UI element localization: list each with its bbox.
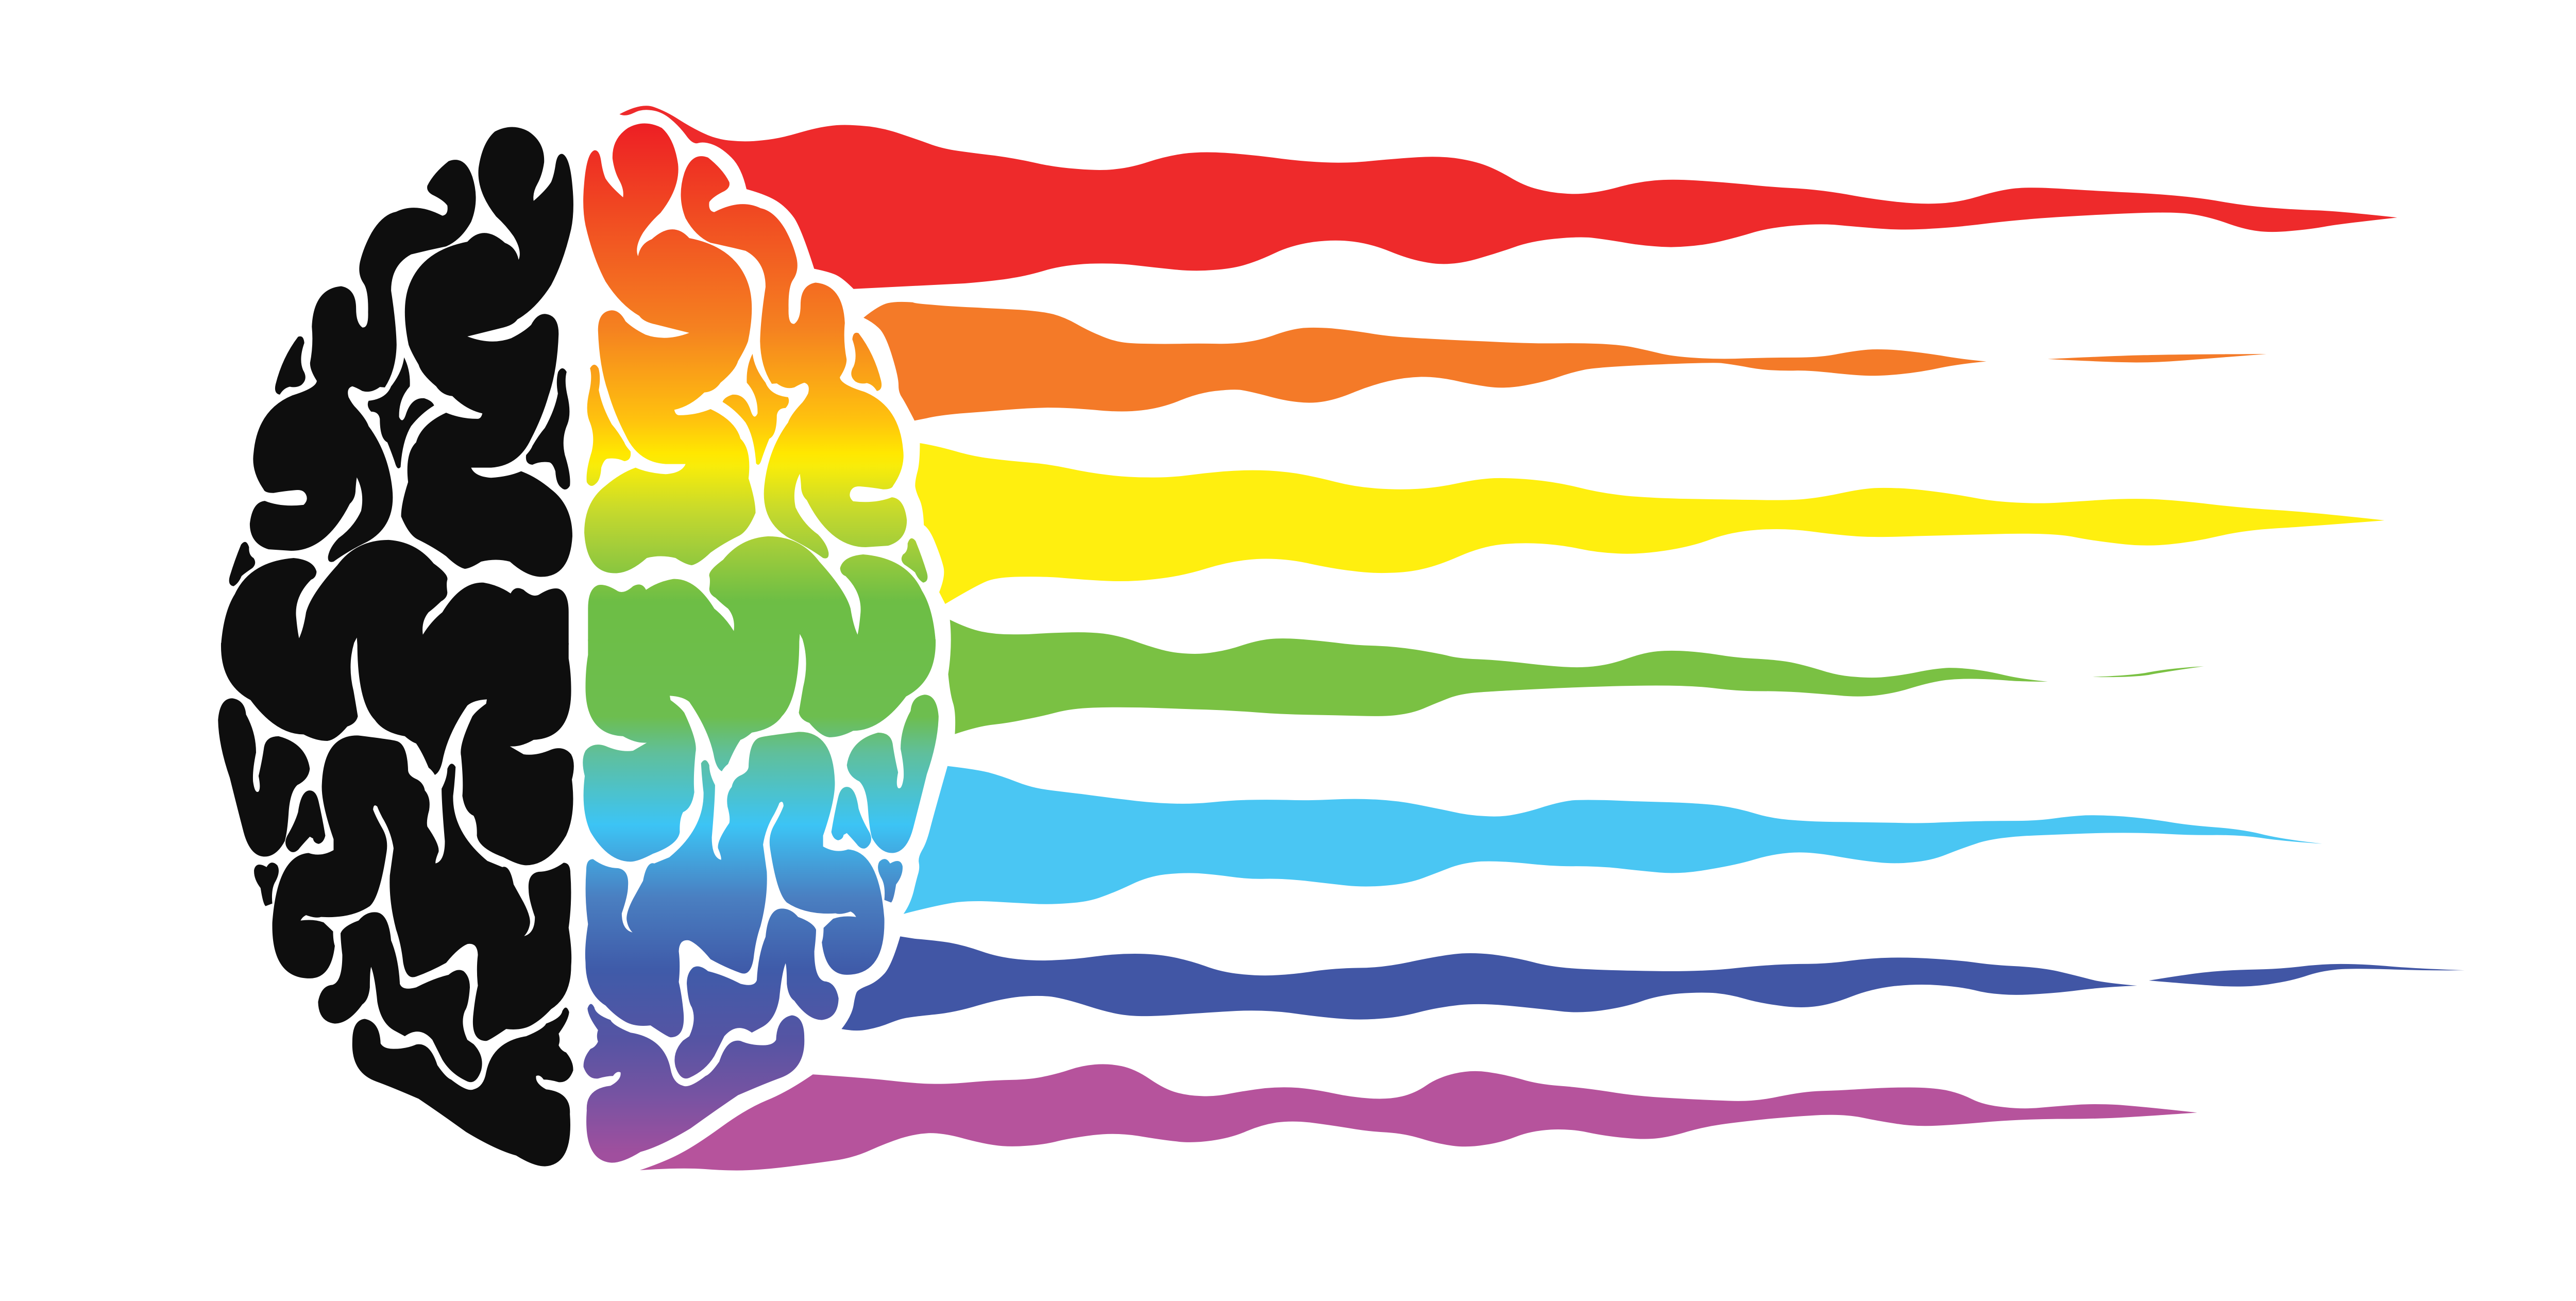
stream: yellow [915,443,2384,604]
stream: magenta [640,1064,2197,1171]
right brain hemisphere: rainbow gradient [583,124,939,1163]
stream: orange [863,302,2266,420]
stream: sky blue [904,766,2322,914]
stream: red [619,106,2397,289]
rainbow streams flowing right [619,106,2465,1171]
stream: indigo [841,936,2465,1030]
stream: green [948,620,2204,734]
left brain hemisphere: black [218,127,574,1167]
illustration: rainbow brain with flowing streams [218,106,2464,1171]
